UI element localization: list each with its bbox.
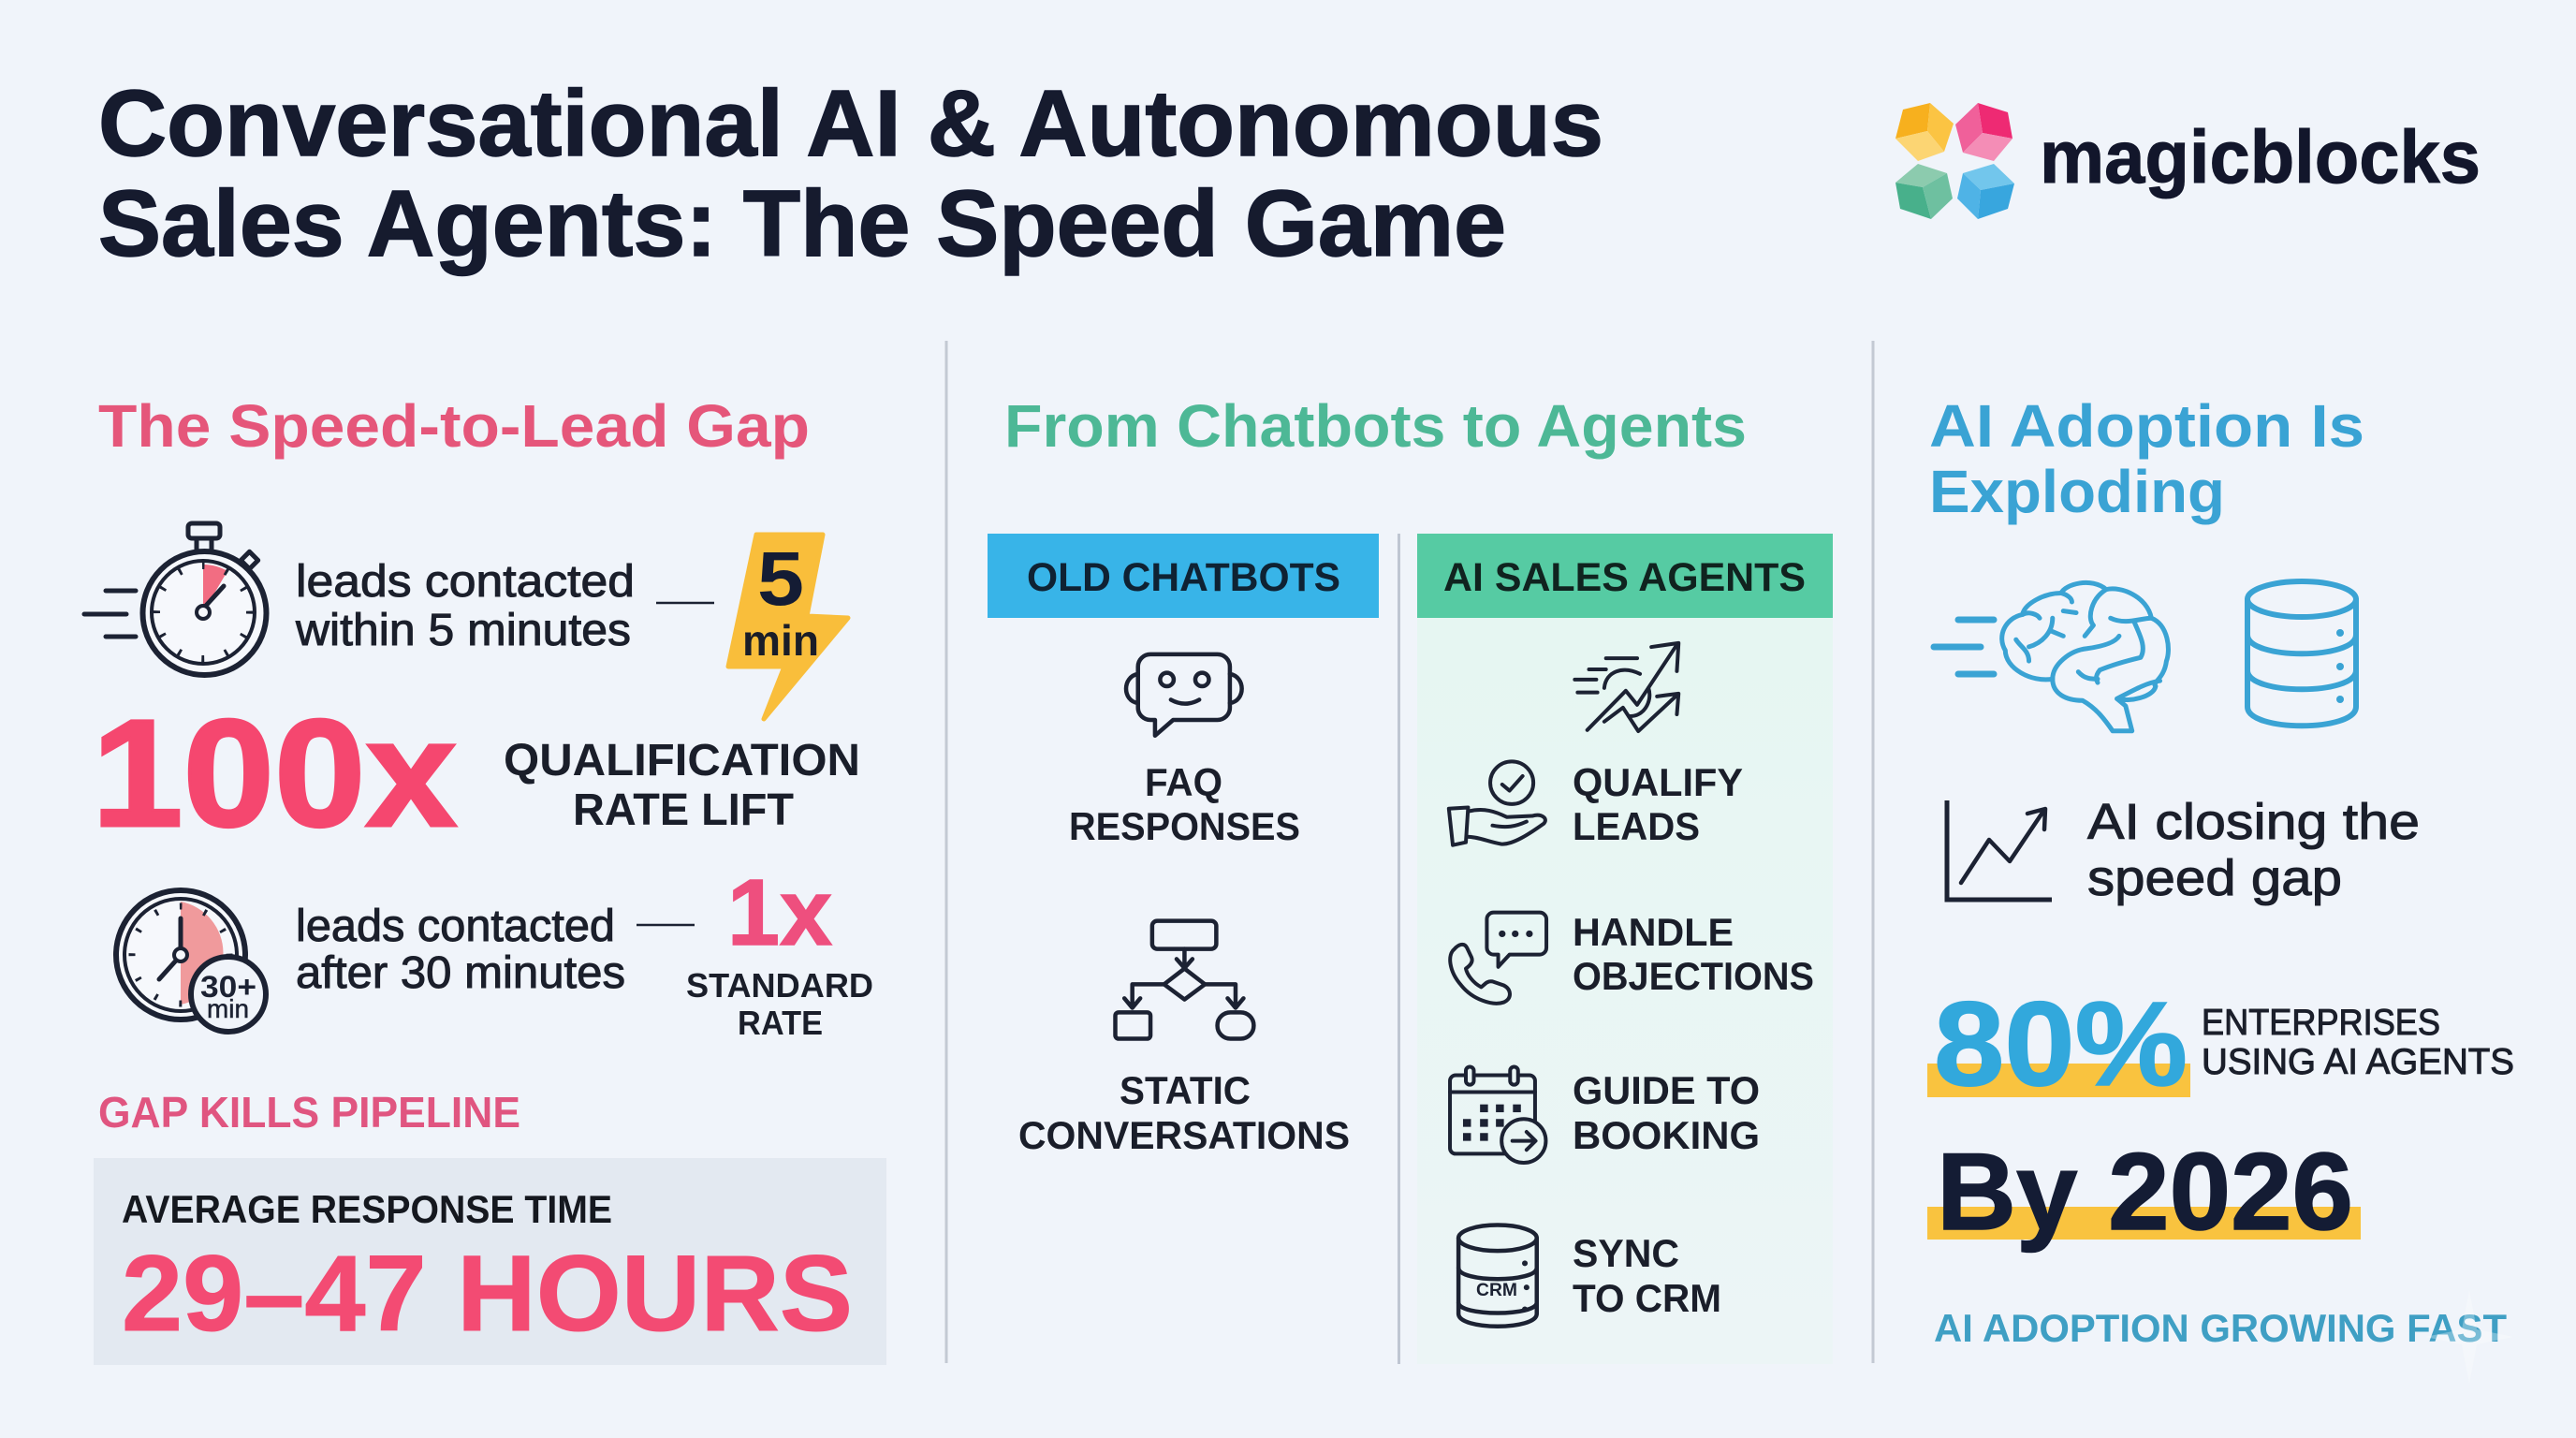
icon: speed arrows [1574,643,1678,731]
label: enterprises using ai agents: USING AI AGENTS [2202,1042,2514,1082]
text: guide to booking [1573,1068,1760,1157]
icon: clock with 30+ min badge: 30+ [200,970,256,1004]
text: sync to crm [1573,1231,1721,1320]
icon: phone and speech bubble [1450,913,1546,1004]
wordmark: magicblocks [2040,115,2481,198]
text: faq responses: RESPONSES [1069,804,1300,848]
heading: speed-to-lead gap: The Speed-to-Lead Gap [98,392,810,460]
stat: 80 percent: 80% [1934,977,2188,1111]
label: enterprises using ai agents [2202,1003,2514,1082]
icon: growth chart [1947,800,2052,900]
title: Conversational AI & Autonomous [98,71,1603,176]
title [98,71,1603,276]
label: qualification rate lift: RATE LIFT [573,785,794,835]
title: Sales Agents: The Speed Game [98,171,1506,276]
heading: from chatbots to agents: From Chatbots to Agents [1004,392,1747,460]
text: qualify leads [1573,760,1743,848]
text: leads after 30 minutes: leads contacted [296,902,615,951]
text: sync to crm: TO CRM [1573,1276,1721,1320]
text: leads within 5 minutes: leads contacted [296,557,635,607]
icon: database [2247,581,2356,726]
text: sync to crm: SYNC [1573,1231,1679,1275]
icon: lightning bolt 5 min: 5 [757,536,804,622]
column: ai sales agents [1417,534,1833,1364]
text: faq responses: FAQ [1145,760,1222,804]
text: leads after 30 minutes: after 30 minutes [296,948,625,998]
text: guide to booking: BOOKING [1573,1113,1760,1157]
logo: magicblocks [1895,103,2481,219]
stat: 1x: 1x [727,860,832,965]
icon: clock with 30+ min badge: min [207,994,249,1023]
text: handle objections [1573,910,1814,998]
heading: ai adoption is exploding: Exploding [1929,458,2225,525]
label: standard rate: STANDARD [686,966,873,1005]
icon: stopwatch with speed lines [84,523,266,675]
icon: chatbot face [1126,654,1242,736]
icon: hand with check [1449,761,1545,845]
callout: average response time [94,1158,886,1365]
label: enterprises using ai agents: ENTERPRISES [2202,1003,2440,1043]
icon: crm database: CRM [1476,1281,1517,1300]
icon: brain with speed lines [1934,582,2168,731]
text: leads after 30 minutes [296,902,625,998]
heading: ai adoption is exploding: AI Adoption Is [1929,392,2364,460]
icon: crm database [1458,1225,1537,1327]
text: qualify leads: QUALIFY [1573,760,1743,804]
header: old chatbots: OLD CHATBOTS [1027,555,1340,600]
callout: average response time: AVERAGE RESPONSE TIME [122,1187,612,1231]
text: handle objections: HANDLE [1573,910,1734,954]
panel: from chatbots to agents [988,392,1833,1364]
heading: ai adoption is exploding [1929,392,2364,525]
column: old chatbots [988,534,1379,1157]
icon: lightning bolt 5 min [728,535,848,719]
text: static conversations: STATIC [1120,1068,1251,1112]
text: static conversations [1018,1068,1350,1157]
label: qualification rate lift: QUALIFICATION [504,736,860,785]
icon: faint sparkle [2425,1290,2513,1384]
header: ai sales agents: AI SALES AGENTS [1443,555,1806,600]
label: standard rate: RATE [738,1004,823,1042]
text: ai closing the speed gap: speed gap [2087,850,2342,906]
label: qualification rate lift [504,736,860,835]
label: standard rate [686,966,873,1042]
icon: clock with 30+ min badge [116,890,266,1032]
icon: lightning bolt 5 min: min [742,616,819,665]
callout: average response time: 29–47 HOURS [122,1234,853,1354]
text: ai closing the speed gap [2087,794,2420,906]
icon: four colored cubes [1895,103,2014,219]
panel: ai adoption is exploding [1927,392,2514,1384]
icon: flowchart [1116,921,1253,1039]
text: handle objections: OBJECTIONS [1573,954,1814,998]
stat: by 2026: By 2026 [1937,1130,2353,1253]
text: leads within 5 minutes [295,557,635,655]
header: ai sales agents [1417,534,1833,618]
text: ai closing the speed gap: AI closing the [2087,794,2420,850]
text: qualify leads: LEADS [1573,804,1700,848]
text: static conversations: CONVERSATIONS [1018,1113,1350,1157]
subheading: gap kills pipeline: GAP KILLS PIPELINE [98,1088,520,1137]
icon: calendar with arrow [1450,1067,1545,1163]
text: faq responses [1069,760,1300,848]
header: old chatbots [988,534,1379,618]
panel: the speed-to-lead gap [84,392,886,1365]
text: guide to booking: GUIDE TO [1573,1068,1760,1112]
stat: 100x: 100x [92,687,457,858]
label: ai adoption growing fast: AI ADOPTION GROWING FAST [1934,1306,2507,1350]
text: leads within 5 minutes: within 5 minutes [295,606,631,655]
